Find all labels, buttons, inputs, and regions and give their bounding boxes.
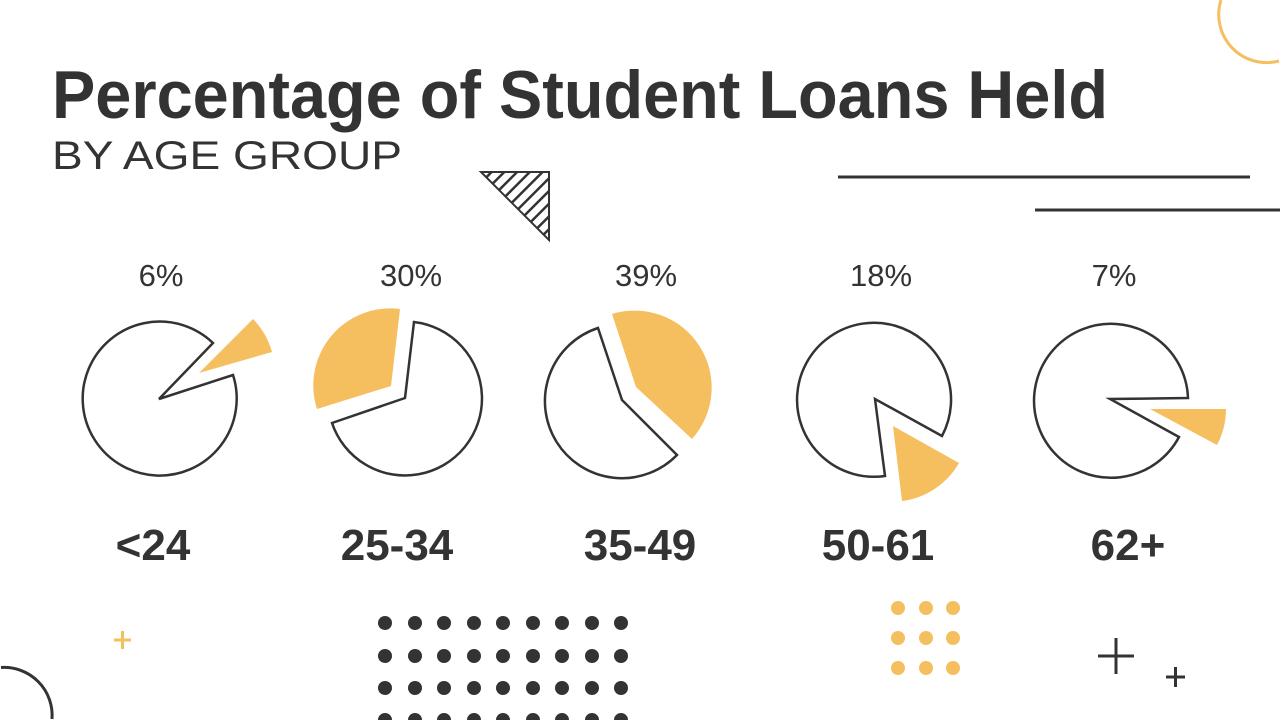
title: Percentage of Student Loans Held bbox=[52, 57, 1108, 133]
percent labels: 39% bbox=[615, 258, 677, 293]
pie: 62+ bbox=[1034, 324, 1226, 478]
pie: 35-49 bbox=[545, 311, 712, 478]
age labels: 50-61 bbox=[822, 521, 934, 570]
percent labels: 6% bbox=[139, 258, 183, 293]
decor: top right orange circle bbox=[1219, 0, 1279, 63]
percent labels: 7% bbox=[1092, 258, 1136, 293]
age labels: 25-34 bbox=[341, 521, 454, 570]
pie: 50-61 bbox=[797, 323, 959, 501]
pie: 25-34 bbox=[313, 308, 482, 475]
age labels: <24 bbox=[116, 521, 191, 570]
subtitle: BY AGE GROUP bbox=[52, 134, 402, 178]
decor: plus signs bbox=[114, 631, 1185, 687]
decor: dark dot grid bbox=[378, 616, 628, 720]
age labels: 35-49 bbox=[584, 521, 696, 570]
percent labels: 18% bbox=[850, 258, 912, 293]
pie: <24 bbox=[83, 319, 272, 476]
percent labels bbox=[139, 258, 1136, 293]
percent labels: 30% bbox=[380, 258, 442, 293]
decor: bottom left dark circle bbox=[1, 667, 52, 719]
decor: orange dot grid bbox=[891, 601, 960, 675]
decor: lines bbox=[838, 177, 1280, 210]
age labels: 62+ bbox=[1091, 521, 1165, 570]
age labels bbox=[116, 521, 1165, 570]
decor: hatched triangle bbox=[481, 172, 549, 240]
